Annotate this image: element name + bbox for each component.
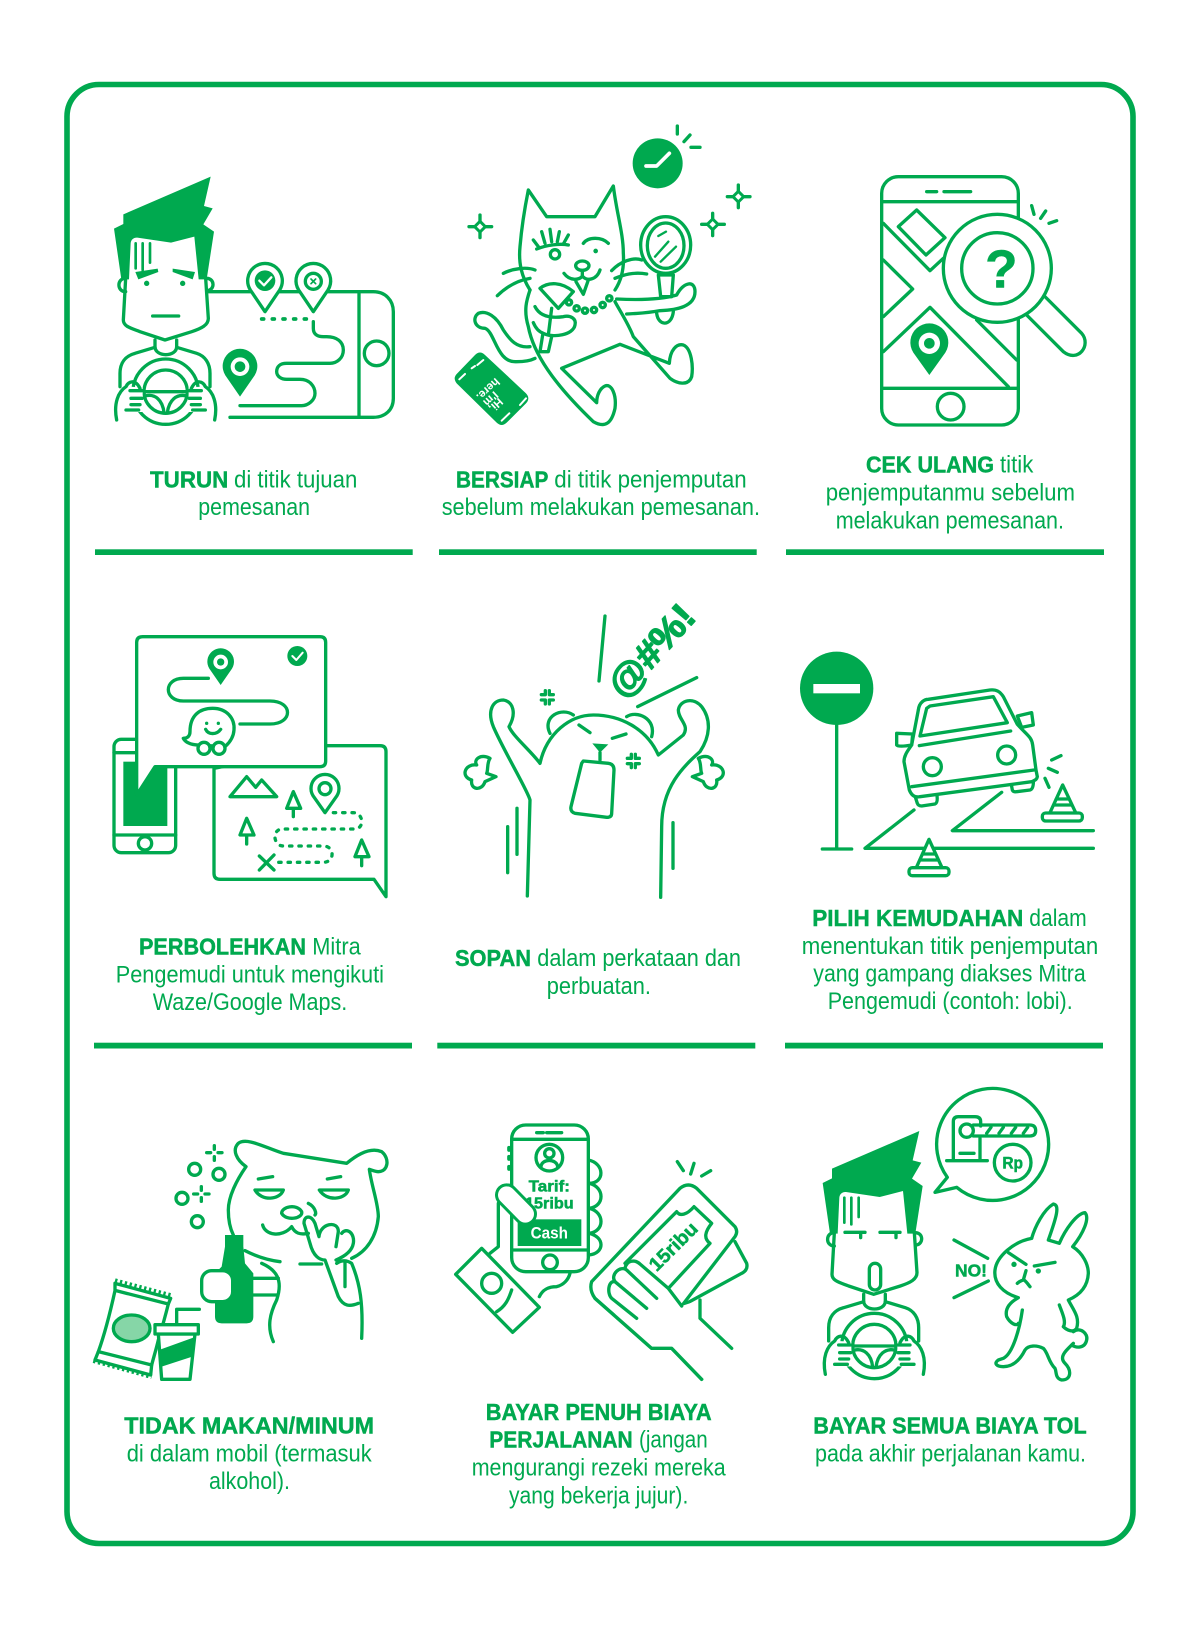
caption: BAYAR SEMUA BIAYA TOL <box>813 1412 1087 1438</box>
motion lines <box>508 616 697 873</box>
character: bear <box>491 700 708 897</box>
icon: driver with phone map <box>114 177 393 424</box>
caption: TIDAK MAKAN/MINUM <box>124 1412 374 1438</box>
caption: Waze/Google Maps. <box>153 989 347 1016</box>
panel: sopan <box>455 596 741 1000</box>
icon: phone on ground: I'm <box>480 388 500 408</box>
caption <box>124 1412 374 1495</box>
caption <box>826 452 1075 534</box>
left hand and banknote <box>456 1148 601 1332</box>
icon: driver, toll bubble and rabbit <box>823 1088 1088 1380</box>
thumb <box>507 1195 525 1214</box>
icon: phone on ground: here. <box>473 375 501 402</box>
caption: yang gampang diakses Mitra <box>813 961 1086 988</box>
outer rounded frame <box>67 84 1133 1544</box>
icon: navigation apps bubbles <box>114 637 386 897</box>
phone with fare: Cash <box>531 1224 568 1243</box>
phone with fare <box>512 1125 588 1272</box>
caption: BAYAR PENUH BIAYA <box>486 1399 712 1425</box>
caption: yang bekerja jujur). <box>509 1482 688 1509</box>
caption: di titik tujuan <box>234 466 357 493</box>
right hand with bill: 15ribu <box>645 1219 703 1276</box>
panel: tidak makan minum <box>93 1141 387 1495</box>
caption: SOPAN <box>455 945 531 971</box>
swearing symbols: @#%! <box>599 596 704 705</box>
divider row 2 <box>94 1043 1103 1048</box>
icon: drunk bear with snacks <box>93 1141 387 1379</box>
caption: di titik penjemputan <box>554 466 747 493</box>
caption: dalam <box>1029 905 1087 932</box>
caption: pemesanan <box>198 494 310 521</box>
caption: BERSIAP <box>456 466 548 492</box>
caption: sebelum melakukan pemesanan. <box>442 494 760 521</box>
character: driver <box>114 177 216 424</box>
panel: cek ulang <box>826 177 1085 534</box>
right hand with bill <box>591 1162 747 1379</box>
character: cat <box>475 186 695 425</box>
shout: no: NO! <box>955 1261 987 1281</box>
icon: traffic cone right <box>1042 785 1082 821</box>
caption <box>802 905 1098 1015</box>
icon: cross pin <box>296 263 331 312</box>
caption: di dalam mobil (termasuk <box>127 1441 373 1468</box>
caption: Pengemudi (contoh: lobi). <box>828 988 1073 1015</box>
icon: shouting bear <box>465 596 723 897</box>
phone with fare: 15ribu <box>525 1196 574 1213</box>
caption <box>813 1412 1087 1468</box>
caption: PILIH KEMUDAHAN <box>812 905 1023 931</box>
icon: car, sign and cones <box>800 652 1093 876</box>
icon: phone on ground: Hi, <box>486 395 505 414</box>
caption: Pengemudi untuk mengikuti <box>116 961 384 988</box>
phone outline with route <box>208 292 393 417</box>
icon: hand mirror <box>641 217 691 323</box>
icon: cat with mirror <box>455 126 750 425</box>
caption: perbuatan. <box>547 973 651 1000</box>
road curb lines <box>865 792 1093 848</box>
character: driver <box>823 1131 924 1379</box>
icon: magnifier <box>943 206 1085 355</box>
caption: mengurangi rezeki mereka <box>472 1455 726 1482</box>
panel: pilih kemudahan <box>800 652 1098 1015</box>
icon: anger marks <box>541 691 639 768</box>
caption <box>472 1399 726 1509</box>
icon: hands with phone and cash <box>456 1125 747 1379</box>
caption: titik <box>1000 452 1034 479</box>
icon: phone map and magnifier <box>882 177 1085 425</box>
caption: dalam perkataan dan <box>537 945 741 972</box>
icon: chips bag <box>93 1281 173 1377</box>
caption <box>116 933 384 1016</box>
panel: bersiap di titik penjemputan <box>442 126 760 521</box>
caption <box>150 466 357 521</box>
icon: cup with straw <box>155 1309 199 1379</box>
icon: sparkles <box>469 185 750 238</box>
caption: melakukan pemesanan. <box>836 507 1064 534</box>
speech bubble: toll gate: Rp <box>1002 1154 1023 1173</box>
caption: CEK ULANG <box>866 452 994 478</box>
speech bubble: toll gate <box>935 1088 1049 1200</box>
icon: phone on ground <box>455 352 528 425</box>
icon: steam puffs <box>465 757 723 788</box>
panel: bayar semua biaya tol <box>813 1088 1088 1468</box>
icon: bottle <box>202 1235 253 1323</box>
caption: PERJALANAN <box>489 1427 633 1453</box>
divider row 1 <box>95 549 1104 555</box>
caption: Mitra <box>312 933 361 960</box>
caption: (jangan <box>639 1427 708 1454</box>
icon: magnifier: ? <box>985 240 1018 299</box>
back bubble with map <box>214 746 386 897</box>
caption <box>455 945 741 1000</box>
shout: no <box>954 1240 988 1298</box>
character: rabbit <box>995 1204 1088 1380</box>
caption: TURUN <box>150 466 228 492</box>
icon: bubbles <box>176 1146 225 1228</box>
icon: car <box>897 690 1061 806</box>
phone behind <box>114 739 176 853</box>
front bubble with waze <box>137 637 326 795</box>
character: bear <box>228 1141 387 1342</box>
phone with fare: Tarif: <box>529 1179 570 1196</box>
phone with map <box>882 177 1018 425</box>
panel: perbolehkan <box>114 637 386 1016</box>
icon: check pin <box>248 263 282 312</box>
caption: PERBOLEHKAN <box>139 933 306 959</box>
icon: no entry sign <box>800 652 873 849</box>
caption: menentukan titik penjemputan <box>802 933 1098 960</box>
caption: pada akhir perjalanan kamu. <box>815 1441 1086 1468</box>
icon: clock <box>633 126 700 188</box>
icon: traffic cone front <box>909 839 949 876</box>
caption <box>442 466 760 521</box>
caption: alkohol). <box>209 1468 290 1495</box>
panel: bayar penuh <box>456 1125 747 1509</box>
caption: penjemputanmu sebelum <box>826 480 1075 507</box>
panel: turun di titik tujuan <box>114 177 393 521</box>
icon: filled pin <box>223 349 257 397</box>
